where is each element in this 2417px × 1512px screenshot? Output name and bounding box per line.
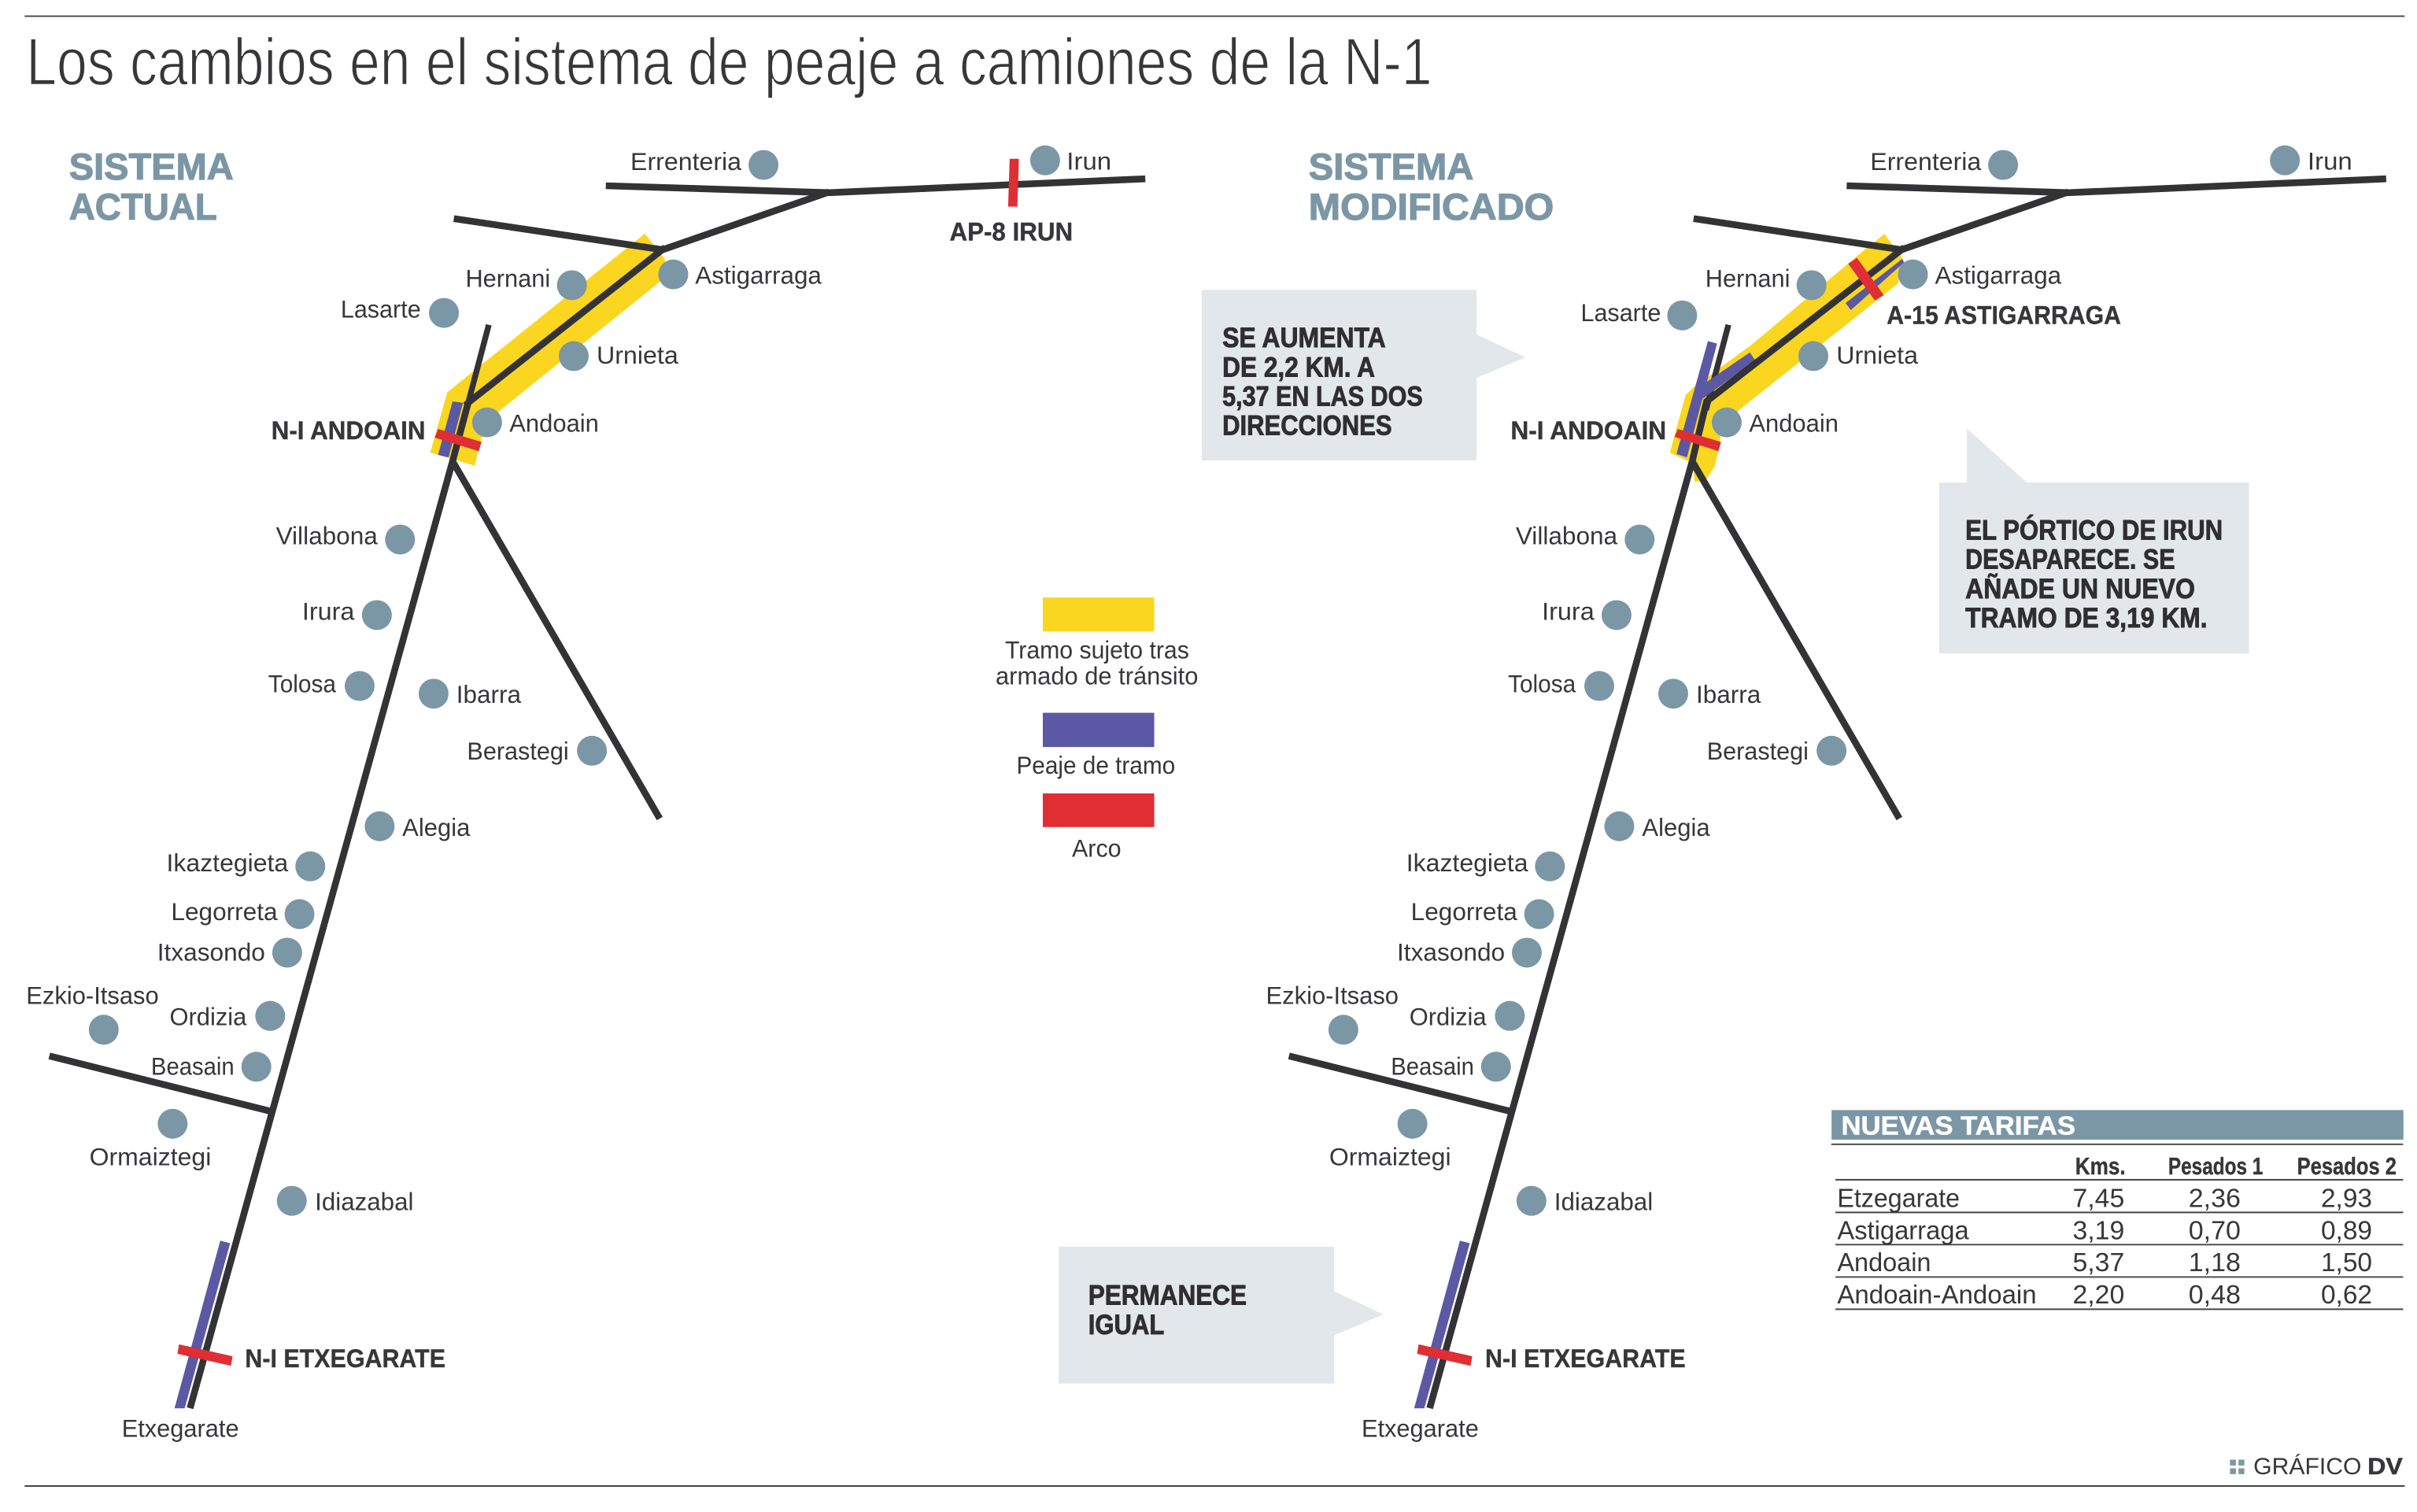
town: Urnieta: Urnieta [597,342,678,369]
label: Etxegarate: Etxegarate [1362,1415,1479,1443]
panel: sistema modificado map [1266,146,2386,1443]
town: Errenteria [1870,148,2018,180]
town: Idiazabal: Idiazabal [1554,1188,1653,1215]
credit: gráfico DV: GRÁFICO [2253,1454,2361,1480]
legend item: arco: Arco [1072,834,1122,862]
label: AP-8 Irun: AP-8 IRUN [949,218,1073,246]
town: Ordizia: Ordizia [1410,1003,1487,1030]
town: Idiazabal [1517,1186,1653,1216]
town: Ordizia [169,1001,285,1031]
table heading bar [1831,1110,2404,1140]
yellow armed transit stretch [1670,234,1903,482]
purple section toll Andoain, diagonal [1698,353,1755,399]
row: Andoain [1837,1248,2372,1277]
town: Astigarraga: Astigarraga [695,261,822,289]
row: Astigarraga [1837,1216,2372,1245]
town: Idiazabal [277,1186,413,1216]
town: Berastegi [1707,736,1846,766]
label: N-I Etxegarate: N-I ETXEGARATE [245,1344,445,1373]
red arch Etxegarate [177,1344,233,1366]
callout: se aumenta [1202,290,1525,460]
label: Etxegarate: Etxegarate [122,1415,239,1443]
red arch Etxegarate [1417,1344,1473,1366]
red arch Andoain [1675,429,1721,451]
title: Los cambios en el sistema de peaje a camiones de la N-1 [26,25,1432,99]
callout: se aumenta: SE AUMENTA [1222,322,1386,353]
row: Andoain: 1,18 [2189,1248,2241,1277]
town: Andoain: Andoain [1749,409,1839,437]
purple section toll Andoain, vertical [1676,341,1717,457]
callout: el pórtico de Irun desaparece: TRAMO DE 3,19 KM. [1965,602,2208,634]
town: Tolosa: Tolosa [268,670,337,697]
purple section toll Etxegarate [1414,1240,1469,1408]
town: Irura [302,598,392,630]
town: Itxasondo: Itxasondo [1397,939,1505,967]
town: Ezkio-Itsaso: Ezkio-Itsaso [26,982,159,1009]
town: Villabona: Villabona [276,523,378,550]
town: Irun [2270,146,2352,176]
callout: el pórtico de Irun desaparece: DESAPARECE. SE [1965,544,2175,575]
town: Irura: Irura [302,598,355,626]
town: Alegia [1604,811,1710,841]
town: Ormaiztegi: Ormaiztegi [90,1144,211,1171]
upper N-I road segment [1706,325,1728,410]
row: Astigarraga: 0,70 [2189,1216,2241,1245]
row: Andoain-Andoain: 0,48 [2189,1281,2241,1310]
town: Alegia [364,811,471,841]
row: Andoain-Andoain: 0,62 [2321,1281,2372,1310]
town: Berastegi: Berastegi [467,738,569,765]
town: Itxasondo: Itxasondo [157,939,265,967]
town: Lasarte: Lasarte [341,295,421,323]
road network [1289,179,2386,1408]
label: N-I Andoain: N-I ANDOAIN [272,416,426,445]
town: Hernani [1706,265,1827,300]
town: Errenteria [630,148,778,180]
town: Ibarra: Ibarra [1696,681,1761,708]
town: Hernani [465,265,587,300]
row: Andoain-Andoain: 2,20 [2072,1281,2124,1310]
heading: sistema modificado: SISTEMA [1309,146,1473,187]
town: Villabona [276,523,415,554]
row: Etzegarate: 7,45 [2072,1185,2124,1214]
town: Urnieta: Urnieta [1836,342,1919,369]
town: Ordizia: Ordizia [169,1003,247,1030]
row: Etzegarate: 2,93 [2321,1185,2372,1214]
town: Ezkio-Itsaso [1266,982,1399,1044]
town: Tolosa [1508,670,1614,701]
row: Andoain: 1,50 [2321,1248,2372,1277]
town: Irura: Irura [1542,598,1595,626]
legend [996,597,1198,862]
callout: el pórtico de Irun desaparece: EL PÓRTICO DE IRUN [1965,514,2223,545]
town: Ikaztegieta [167,849,325,882]
row: Etzegarate [1837,1185,2372,1214]
town: Irun: Irun [1066,147,1111,175]
town: Lasarte: Lasarte [1580,299,1661,327]
town: Itxasondo [157,937,302,967]
town: Andoain: Andoain [509,409,599,437]
purple section toll A-15 [1846,259,1904,310]
town: Lasarte [341,295,459,328]
town: Urnieta [559,341,678,371]
town: Berastegi [467,736,607,766]
town: Ibarra [419,678,522,708]
row: Andoain: 5,37 [2072,1248,2124,1277]
town: Villabona: Villabona [1516,523,1618,550]
callout: permanece igual [1059,1247,1384,1384]
town: Ormaiztegi [90,1109,211,1171]
town: Beasain [1391,1052,1511,1081]
town: Irura [1542,598,1632,630]
row: Astigarraga: 3,19 [2072,1216,2124,1245]
road network [50,179,1145,1408]
label: A-15 Astigarraga: A-15 ASTIGARRAGA [1887,301,2121,329]
town: Ibarra [1658,678,1761,708]
row: Astigarraga: 0,89 [2321,1216,2372,1245]
callout: el pórtico de Irun desaparece [1939,428,2249,653]
heading: sistema actual: SISTEMA [69,146,234,187]
town: Legorreta: Legorreta [171,898,278,926]
row: Andoain-Andoain [1837,1281,2372,1310]
town: Irun [1030,146,1111,176]
town: Ormaiztegi: Ormaiztegi [1329,1144,1451,1171]
town: Tolosa: Tolosa [1508,670,1576,697]
row: Etzegarate: Etzegarate [1837,1185,1960,1214]
purple section toll Andoain [438,401,463,457]
label: N-I Andoain: N-I ANDOAIN [1510,416,1666,445]
red arch AP-8 Irun [1008,159,1019,206]
callout: el pórtico de Irun desaparece: AÑADE UN NUEVO [1965,573,2195,604]
town: Villabona [1516,523,1654,554]
town: Ordizia [1410,1001,1524,1031]
heading: sistema modificado [1309,146,1554,227]
town: Ezkio-Itsaso [26,982,159,1044]
legend item: peaje de tramo: Peaje de tramo [1016,752,1175,779]
town: Urnieta [1798,341,1919,371]
row: Andoain-Andoain: Andoain-Andoain [1837,1281,2037,1310]
red arch Andoain [434,429,482,451]
town: Hernani: Hernani [1706,265,1790,293]
table heading bar: NUEVAS TARIFAS [1841,1111,2075,1140]
column headers: Pesados 2 [2297,1154,2397,1180]
purple section toll Etxegarate [175,1240,230,1408]
row: Astigarraga: Astigarraga [1837,1216,1969,1245]
legend item: arco [1043,793,1155,862]
heading: sistema modificado: MODIFICADO [1309,186,1554,227]
town: Itxasondo [1397,937,1542,967]
callout: permanece igual: IGUAL [1088,1309,1164,1340]
credit: gráfico DV [2230,1454,2403,1480]
yellow armed transit stretch [431,234,665,466]
town: Legorreta [171,898,315,929]
town: Irun: Irun [2308,147,2352,175]
town: Alegia: Alegia [1642,814,1710,841]
town: Lasarte [1580,299,1697,331]
table: nuevas tarifas [1831,1110,2404,1310]
town: Ikaztegieta: Ikaztegieta [1406,849,1528,877]
legend item: tramo sujeto: Tramo sujeto tras [1005,637,1189,664]
town: Berastegi: Berastegi [1707,738,1809,765]
callout: permanece igual: PERMANECE [1088,1279,1247,1311]
row: Andoain: Andoain [1837,1248,1931,1277]
legend item: tramo sujeto [996,597,1198,689]
credit: gráfico DV: DV [2367,1454,2403,1480]
town: Beasain: Beasain [1391,1052,1474,1080]
panel: sistema actual map [26,146,1145,1443]
town: Ezkio-Itsaso: Ezkio-Itsaso [1266,982,1399,1009]
town: Ikaztegieta: Ikaztegieta [167,849,289,877]
label: N-I Etxegarate: N-I ETXEGARATE [1485,1344,1686,1373]
column headers: Pesados 1 [2168,1154,2263,1180]
town: Tolosa [268,670,375,701]
callout: se aumenta: DE 2,2 KM. A [1222,351,1375,383]
callout: se aumenta: 5,37 EN LAS DOS [1222,380,1423,412]
town: Hernani: Hernani [465,265,550,293]
town: Ikaztegieta [1406,849,1565,882]
town: Beasain [151,1052,272,1081]
legend item: tramo sujeto: armado de tránsito [996,662,1198,689]
town: Alegia: Alegia [402,814,471,841]
callout: se aumenta: DIRECCIONES [1222,410,1392,442]
town: Errenteria: Errenteria [630,148,742,176]
town: Legorreta: Legorreta [1411,898,1517,926]
heading: sistema actual: ACTUAL [69,186,217,227]
town: Beasain: Beasain [151,1052,235,1080]
heading: sistema actual [69,146,234,227]
town: Andoain [1712,408,1839,438]
column headers: Kms. [2075,1154,2126,1180]
town: Ormaiztegi [1329,1109,1451,1171]
red arch A-15 [1848,258,1884,301]
town: Andoain [472,408,599,438]
column headers [2075,1154,2397,1180]
town: Idiazabal: Idiazabal [315,1188,413,1215]
town: Astigarraga: Astigarraga [1935,261,2062,289]
legend item: peaje de tramo [1016,713,1175,779]
town: Errenteria: Errenteria [1870,148,1982,176]
row: Etzegarate: 2,36 [2189,1185,2241,1214]
icon: four squares [2230,1460,2245,1474]
town: Ibarra: Ibarra [456,681,522,708]
town: Legorreta [1411,898,1554,929]
